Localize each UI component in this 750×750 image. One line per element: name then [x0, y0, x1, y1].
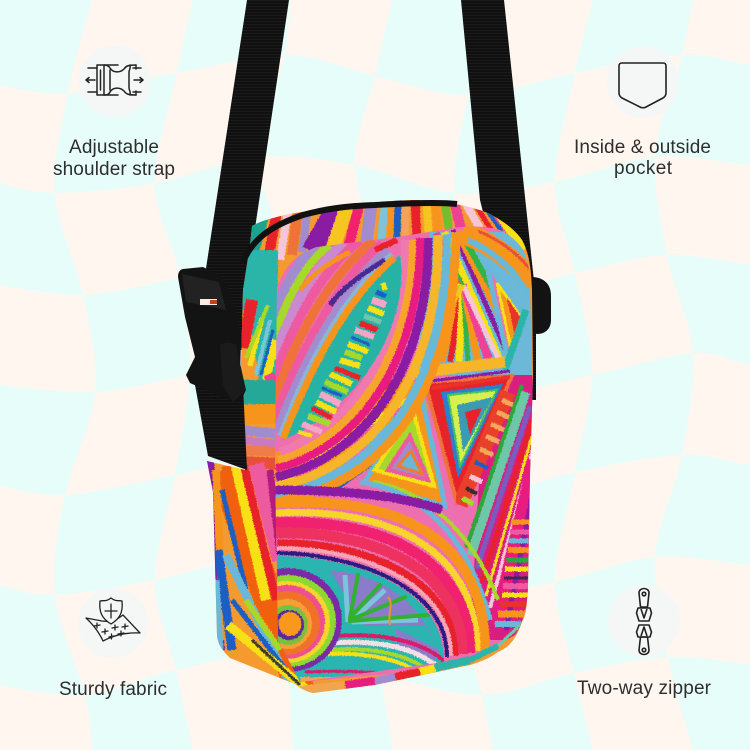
small triangle ring — [375, 410, 434, 486]
feature: inside and outside pocket — [574, 46, 711, 179]
small triangle core — [398, 451, 422, 474]
buckle body — [178, 267, 246, 402]
light outer stripes — [373, 482, 498, 600]
lilac lower patch — [395, 628, 440, 660]
navy band — [277, 553, 447, 657]
teal lower wedge — [340, 625, 445, 662]
teal field — [270, 550, 450, 690]
buckle ribbed top — [182, 274, 226, 310]
ladder dashes — [480, 400, 515, 455]
orange band — [275, 502, 485, 650]
icon backdrop circle — [78, 588, 148, 658]
yellow band — [275, 512, 477, 651]
lower bands — [300, 635, 445, 680]
leaf left bands, outermost first — [276, 247, 319, 318]
icon: fabric with shield — [86, 598, 140, 641]
buckle slot — [200, 299, 217, 305]
icon: pocket — [619, 63, 666, 108]
small triangle inner — [388, 436, 428, 480]
connecting stripes — [274, 392, 420, 476]
icon: buckle — [86, 65, 143, 95]
big triangle teal — [457, 397, 493, 452]
top zip panel stripes — [250, 198, 526, 260]
inner arc scene — [234, 550, 450, 690]
long stripes — [466, 385, 522, 548]
feature: sturdy fabric — [59, 588, 167, 700]
hot pink band — [275, 533, 462, 654]
bag body — [200, 195, 540, 700]
gusset stripes — [224, 470, 300, 690]
strap: left lower — [195, 385, 247, 470]
pink band — [275, 523, 470, 653]
gusset teal — [238, 250, 278, 310]
big triangle red — [425, 376, 512, 500]
buckle: right — [530, 277, 551, 334]
right diagonal stripes — [460, 385, 536, 630]
label: inside and outside: Inside & outside — [574, 137, 711, 158]
orange corner band — [462, 232, 532, 285]
label: adjustable: Adjustable — [69, 137, 159, 158]
big triangle core — [465, 408, 482, 435]
leaf orange edge — [283, 258, 394, 438]
right nested triangle — [485, 270, 518, 356]
lower pocket gusset — [209, 460, 310, 692]
buckle slot colour — [210, 300, 217, 304]
icon: zipper — [636, 588, 652, 654]
upper right fan — [432, 230, 532, 370]
outer right bands — [274, 232, 456, 502]
front panel — [275, 226, 533, 682]
central fan rays — [432, 285, 463, 360]
icon backdrop circle — [79, 45, 151, 117]
gusset red and yellow stripes — [241, 298, 277, 470]
red band — [277, 543, 455, 656]
strap: right — [461, 0, 536, 400]
stacked dashes — [511, 520, 530, 524]
label: shoulder strap: shoulder strap — [53, 159, 175, 180]
leaf teal interior — [283, 255, 401, 440]
green fan strokes — [350, 575, 428, 621]
zipper — [243, 203, 457, 262]
buckle: left — [178, 267, 246, 402]
lilac fan — [330, 570, 440, 660]
big arc bands — [275, 482, 498, 657]
label: two-way zipper: Two-way zipper — [577, 678, 712, 699]
big triangle blue — [441, 384, 503, 478]
horizontal bars — [415, 362, 505, 373]
spiral rings — [234, 568, 342, 672]
upper side gusset — [238, 250, 280, 464]
lower triangles — [274, 362, 512, 506]
pale band — [277, 548, 451, 656]
icon backdrop circle — [607, 46, 679, 118]
right stripes base — [470, 375, 535, 640]
bag base colour — [200, 195, 540, 700]
ladder base — [460, 392, 508, 505]
label: sturdy fabric: Sturdy fabric — [59, 679, 167, 700]
front panel base — [270, 225, 540, 695]
icon backdrop circle — [608, 585, 680, 657]
leaf central stripes — [383, 283, 385, 290]
strap: left upper — [205, 0, 289, 350]
buckle clip — [220, 342, 246, 402]
feature: adjustable shoulder strap — [53, 45, 175, 180]
fan base — [415, 232, 532, 375]
feature: two-way zipper — [577, 585, 712, 699]
label: pocket: pocket — [614, 158, 673, 179]
small triangle outer — [365, 388, 445, 506]
diagonal stripes — [436, 233, 490, 360]
orange signature — [388, 597, 392, 632]
bottom edge band — [300, 625, 520, 690]
big triangle lime — [448, 390, 497, 466]
fan light rays — [345, 575, 418, 622]
leaf with sweeping bands — [268, 232, 456, 502]
